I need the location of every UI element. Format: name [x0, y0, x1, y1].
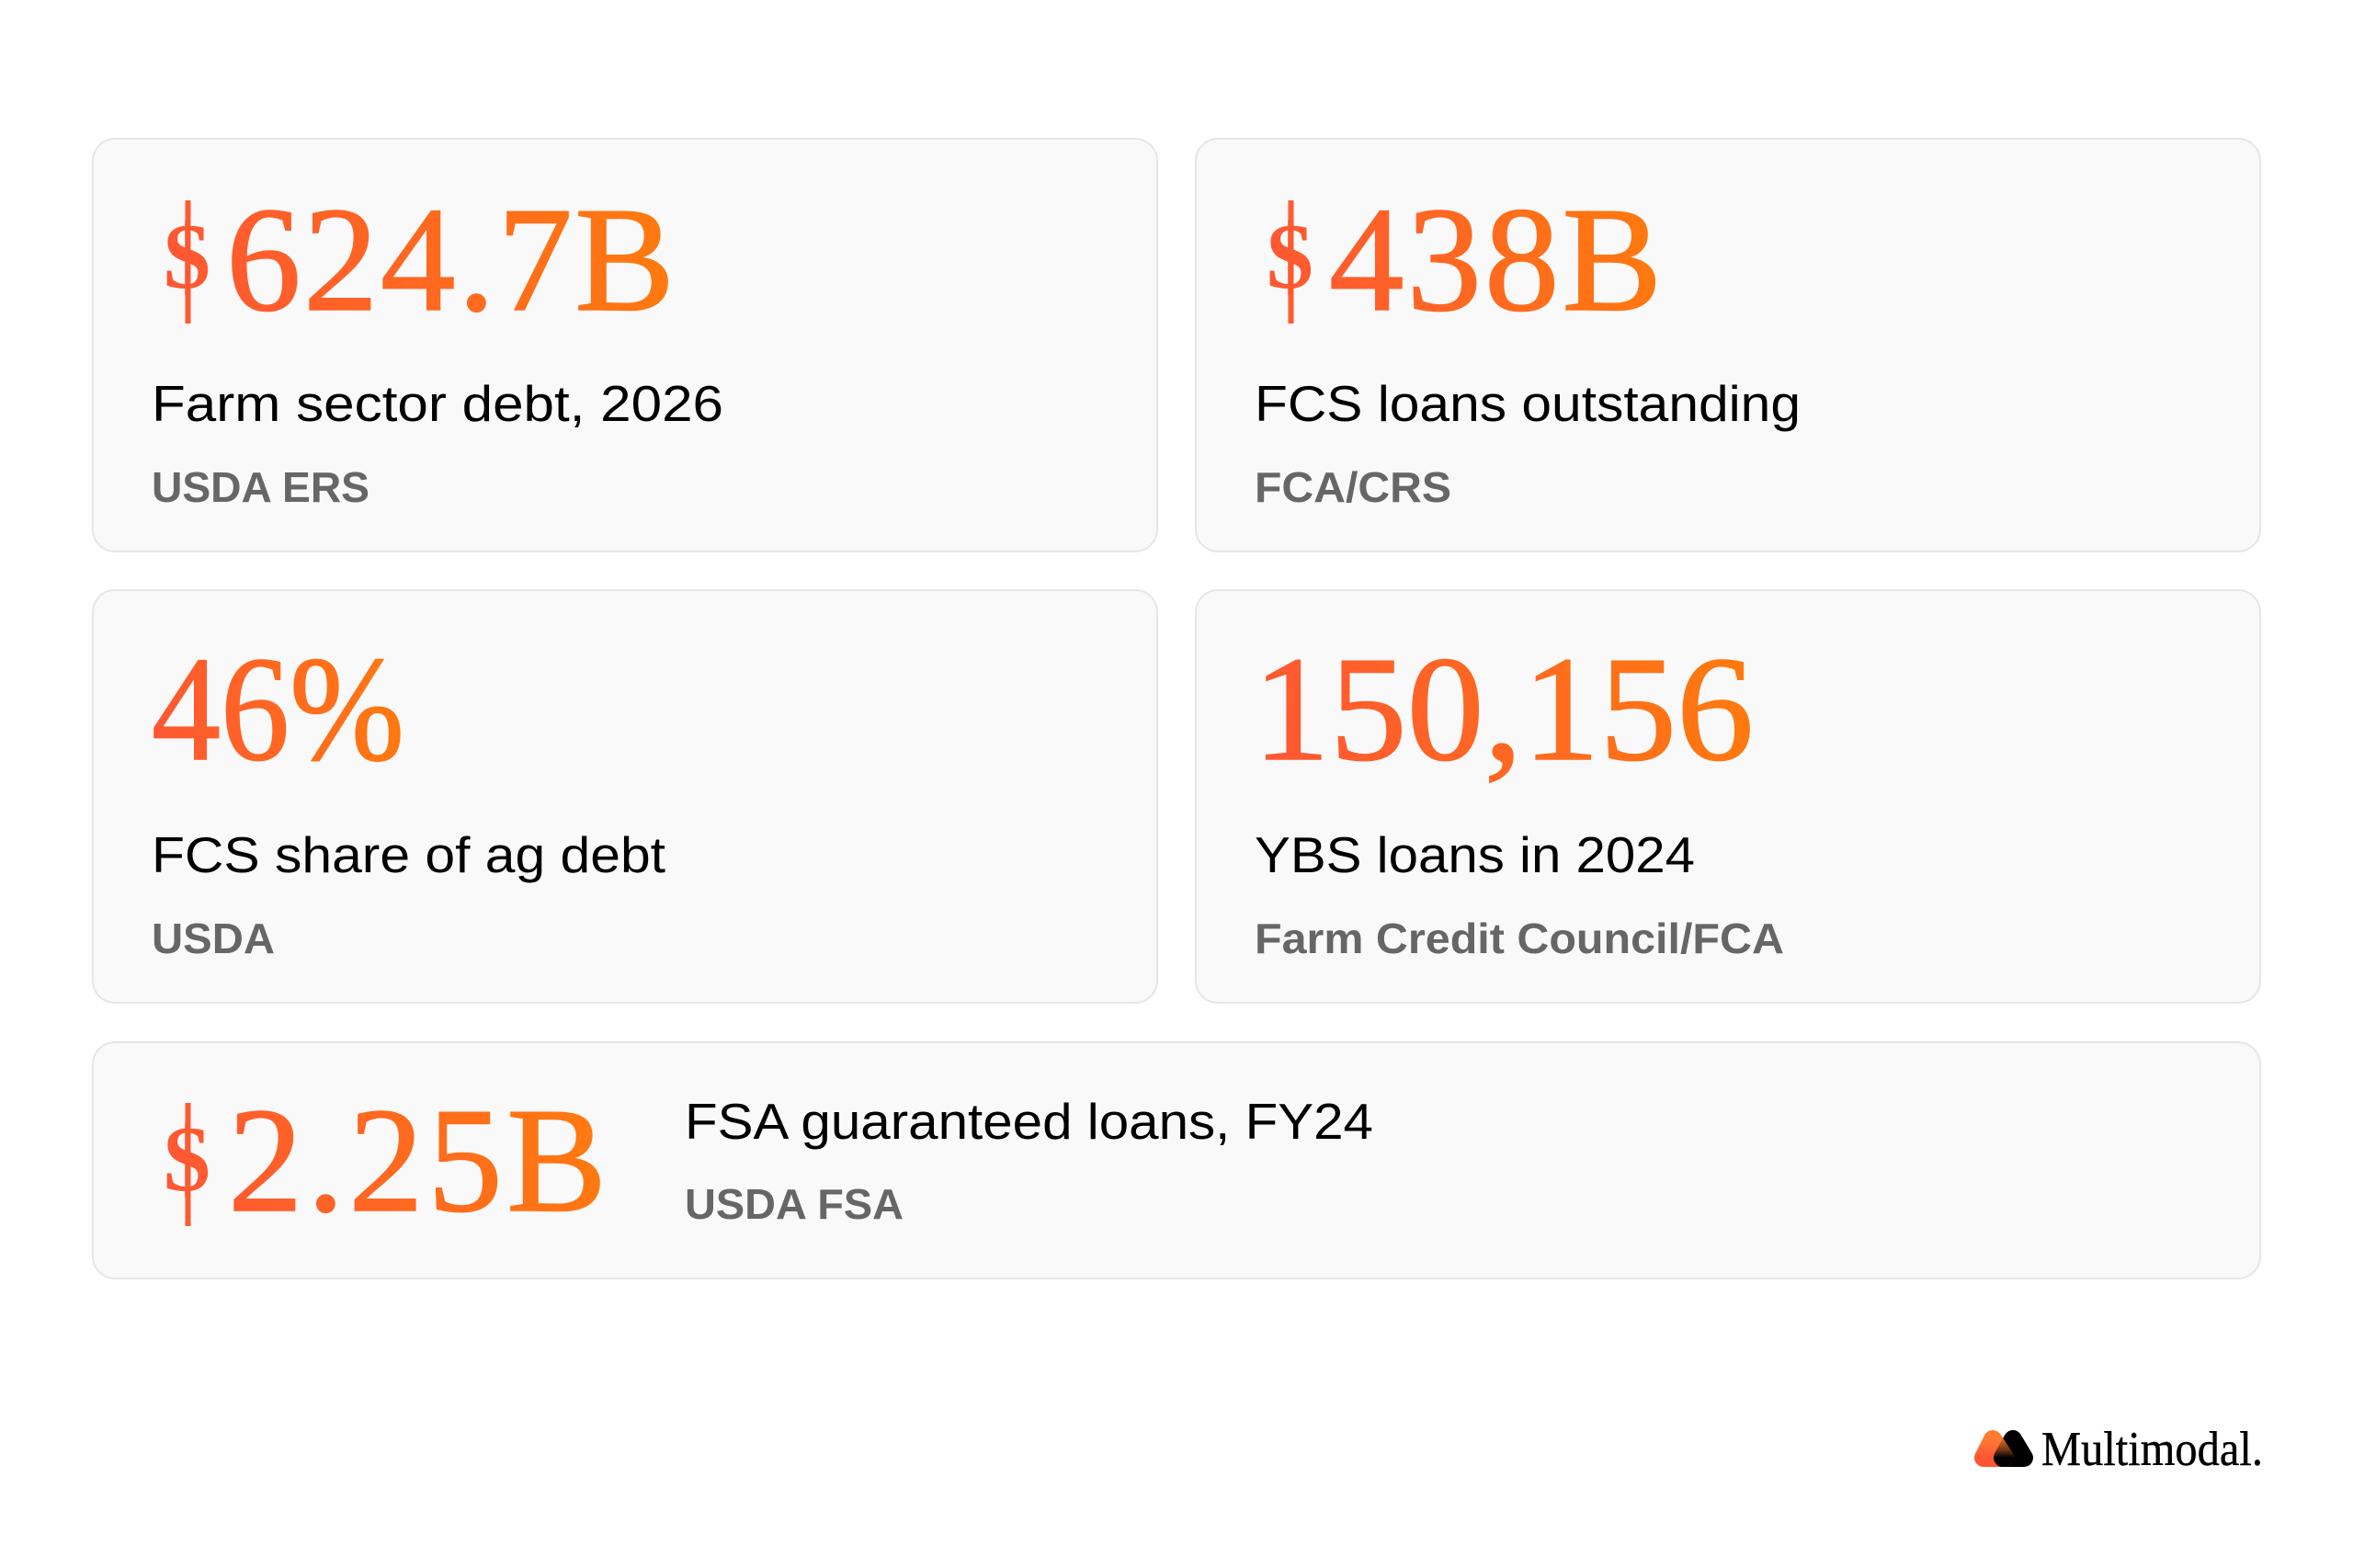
panel: FCS share of ag debt — [93, 590, 1157, 1003]
label: farm sector debt: Farm sector debt, 2026 — [152, 375, 723, 432]
stat: 46%: 46% — [152, 627, 404, 792]
label: FCS share of ag debt: FCS share of ag debt — [152, 826, 665, 883]
panel: YBS loans — [1196, 590, 2260, 1003]
source: USDA: USDA — [152, 915, 275, 962]
stat: 150,156: 150,156 — [1253, 627, 1754, 792]
panel: FSA guaranteed loans — [93, 1042, 2260, 1278]
panel: farm sector debt — [93, 139, 1157, 551]
label: YBS loans in 2024: YBS loans in 2024 — [1255, 826, 1695, 883]
stat: $438B: 438B — [1329, 177, 1665, 343]
stat: $624.7B: $ — [164, 205, 210, 309]
source: FCA/CRS: FCA/CRS — [1255, 463, 1451, 511]
source: USDA FSA: USDA FSA — [685, 1180, 904, 1228]
source: USDA ERS: USDA ERS — [152, 463, 369, 511]
panel: FCS loans outstanding — [1196, 139, 2260, 551]
source: Farm Credit Council/FCA: Farm Credit Council/FCA — [1255, 915, 1784, 962]
logo: Multimodal — [1974, 1430, 2260, 1467]
stat: $2.25B: $ — [164, 1108, 210, 1211]
label: FSA guaranteed loans: FSA guaranteed loans, FY24 — [685, 1093, 1373, 1150]
stat: $624.7B: 624.7B — [226, 177, 676, 343]
label: FCS loans outstanding: FCS loans outstanding — [1255, 375, 1801, 432]
stat: $438B: $ — [1267, 205, 1313, 309]
wordmark: Multimodal. — [2041, 1423, 2263, 1476]
stat: $2.25B: 2.25B — [228, 1078, 610, 1244]
icon: Multimodal mark — [1984, 1439, 2024, 1458]
